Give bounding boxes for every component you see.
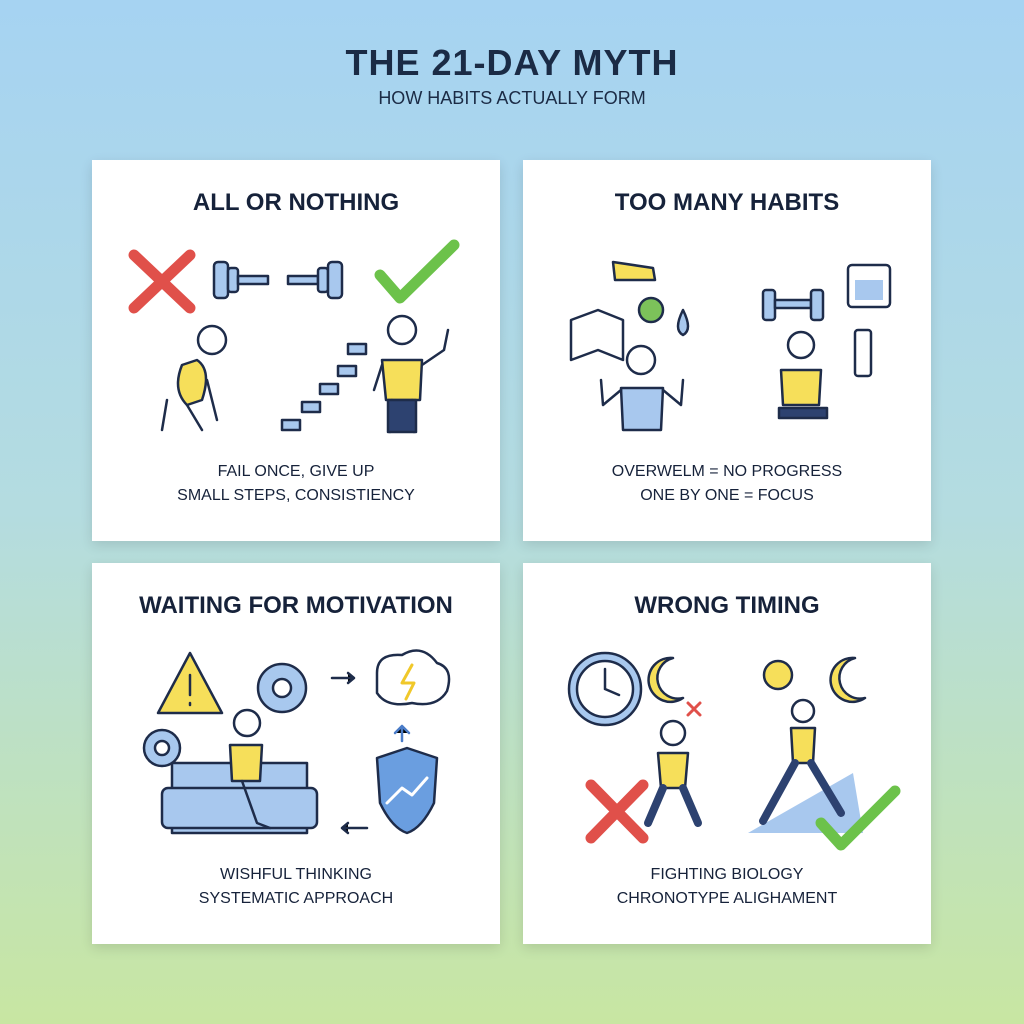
caption: FIGHTING BIOLOGY bbox=[651, 866, 803, 883]
caption bbox=[612, 463, 842, 504]
caption: SMALL STEPS, CONSISTIENCY bbox=[177, 487, 415, 504]
heading: WAITING FOR MOTIVATION bbox=[139, 592, 453, 619]
caption: SYSTEMATIC APPROACH bbox=[199, 890, 393, 907]
panel: waiting for motivation bbox=[92, 563, 500, 944]
panel: too many habits bbox=[523, 160, 931, 541]
illustration bbox=[568, 652, 900, 850]
illustration bbox=[128, 240, 460, 434]
heading: TOO MANY HABITS bbox=[615, 189, 839, 216]
subtitle: HOW HABITS ACTUALLY FORM bbox=[378, 88, 646, 108]
caption bbox=[617, 866, 837, 907]
caption bbox=[177, 463, 415, 504]
caption: OVERWELM = NO PROGRESS bbox=[612, 463, 842, 480]
caption: ONE BY ONE = FOCUS bbox=[640, 487, 814, 504]
illustration bbox=[142, 649, 450, 834]
illustration bbox=[570, 260, 892, 432]
caption bbox=[199, 866, 393, 907]
panel: wrong timing bbox=[523, 563, 931, 944]
panel: all or nothing bbox=[92, 160, 500, 541]
title: THE 21-DAY MYTH bbox=[345, 42, 679, 83]
caption: CHRONOTYPE ALIGHAMENT bbox=[617, 890, 837, 907]
caption: FAIL ONCE, GIVE UP bbox=[218, 463, 374, 480]
heading: ALL OR NOTHING bbox=[193, 189, 399, 216]
caption: WISHFUL THINKING bbox=[220, 866, 372, 883]
heading: WRONG TIMING bbox=[634, 592, 820, 619]
